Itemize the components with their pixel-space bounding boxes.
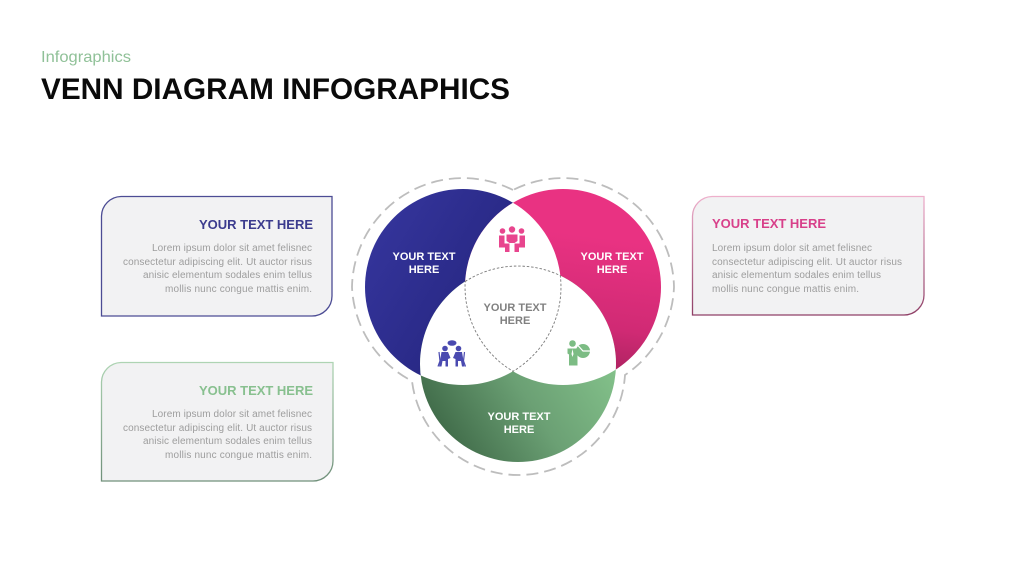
title: VENN DIAGRAM INFOGRAPHICS [41, 73, 510, 106]
circle: green [420, 266, 616, 462]
text block: blue panel: Lorem ipsum dolor sit amet felisnec [152, 243, 312, 254]
panel: bottom left green [102, 362, 333, 481]
heading: pink panel: YOUR TEXT HERE [712, 216, 826, 231]
text block: green panel: mollis nunc congue mattis enim. [165, 450, 312, 461]
icon: meeting team [499, 226, 525, 252]
icon: two people talking [438, 340, 466, 366]
text block: pink panel: mollis nunc congue mattis enim. [712, 284, 859, 295]
text block: pink panel: consectetur adipiscing elit. Ut auctor risus [712, 257, 902, 268]
heading: blue panel: YOUR TEXT HERE [199, 217, 313, 232]
label: centre: YOUR TEXT [484, 302, 547, 314]
text block: blue panel: anisic elementum sodales enim tellus [143, 270, 312, 281]
label: green: YOUR TEXT [488, 411, 551, 423]
text block: pink panel: Lorem ipsum dolor sit amet felisnec [712, 243, 872, 254]
text block: green panel [123, 409, 312, 461]
panel: top left blue [102, 196, 332, 316]
text block: pink panel [712, 243, 902, 295]
text block: blue panel: mollis nunc congue mattis enim. [165, 284, 312, 295]
text block: green panel: anisic elementum sodales enim tellus [143, 436, 312, 447]
text block: blue panel: consectetur adipiscing elit. Ut auctor risus [123, 257, 312, 268]
overlap: blue and green [420, 282, 512, 385]
venn diagram [352, 178, 674, 475]
text block: pink panel: anisic elementum sodales enim tellus [712, 270, 881, 281]
text block: green panel: consectetur adipiscing elit. Ut auctor risus [123, 423, 312, 434]
label: blue: YOUR TEXT [393, 251, 456, 263]
text block: blue panel [123, 243, 312, 295]
dashed centre region [465, 266, 561, 371]
panel: top right pink [692, 196, 924, 315]
circle: pink [465, 189, 661, 385]
label: blue: HERE [409, 264, 439, 276]
overlap: blue and pink [465, 202, 560, 281]
text block: green panel: Lorem ipsum dolor sit amet felisnec [152, 409, 312, 420]
label: centre: HERE [500, 315, 530, 327]
heading: green panel: YOUR TEXT HERE [199, 383, 313, 398]
label: pink: HERE [597, 264, 627, 276]
icon: presenter with pie chart [568, 340, 590, 366]
overlap: pink and green [514, 276, 616, 385]
subtitle: Infographics [41, 49, 131, 66]
label: pink: YOUR TEXT [581, 251, 644, 263]
dashed outer outline [352, 178, 674, 475]
label: green: HERE [504, 424, 534, 436]
circle: blue [365, 189, 561, 385]
